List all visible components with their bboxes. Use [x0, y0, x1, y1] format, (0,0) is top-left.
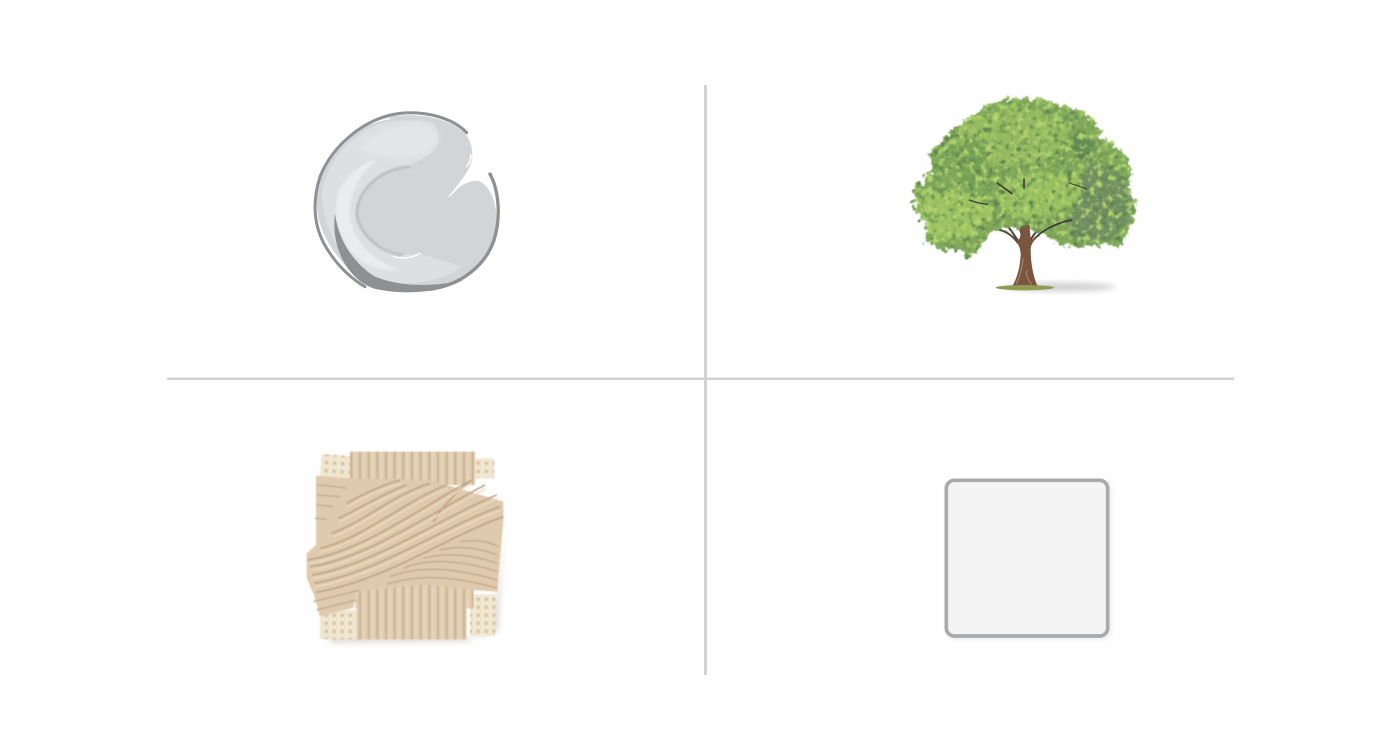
panel: blank square	[946, 480, 1111, 639]
icon: dark lower crescent	[334, 213, 463, 292]
icon: light crescent	[322, 120, 462, 283]
panel: tree	[913, 98, 1137, 292]
icon: diagonal strand shadows	[307, 480, 503, 592]
icon: ground shadow	[1005, 282, 1115, 292]
icon: white glints	[330, 118, 471, 258]
icon: square shadow	[947, 482, 1111, 639]
icon: wrap band	[307, 476, 503, 617]
icon: outer ring strokes	[315, 113, 498, 289]
icon: trunk bark detail	[1016, 258, 1032, 284]
icon: grass mound	[996, 285, 1054, 290]
icon: tree trunk	[1013, 225, 1040, 286]
icon: diagonal strand highlights	[308, 484, 501, 587]
icon: highlight at top of swirl	[358, 123, 438, 158]
icon: branches visible through canopy	[969, 179, 1087, 243]
icon: lower horizontal strands	[313, 485, 498, 610]
icon: tree branches under canopy	[970, 178, 1077, 245]
icon: ribbed back panels	[350, 452, 475, 639]
icon: rounded square tile	[946, 480, 1108, 636]
icon: net corners	[320, 454, 495, 639]
icon: pale band on lower left	[336, 159, 400, 271]
icon: gel body	[317, 115, 497, 290]
panel: woven fabric	[307, 452, 503, 643]
icon: fabric shadow	[327, 535, 503, 643]
panel: gel swirl	[315, 113, 498, 292]
icon: tree canopy	[913, 98, 1137, 257]
icon: inner shadow edge	[357, 167, 410, 255]
